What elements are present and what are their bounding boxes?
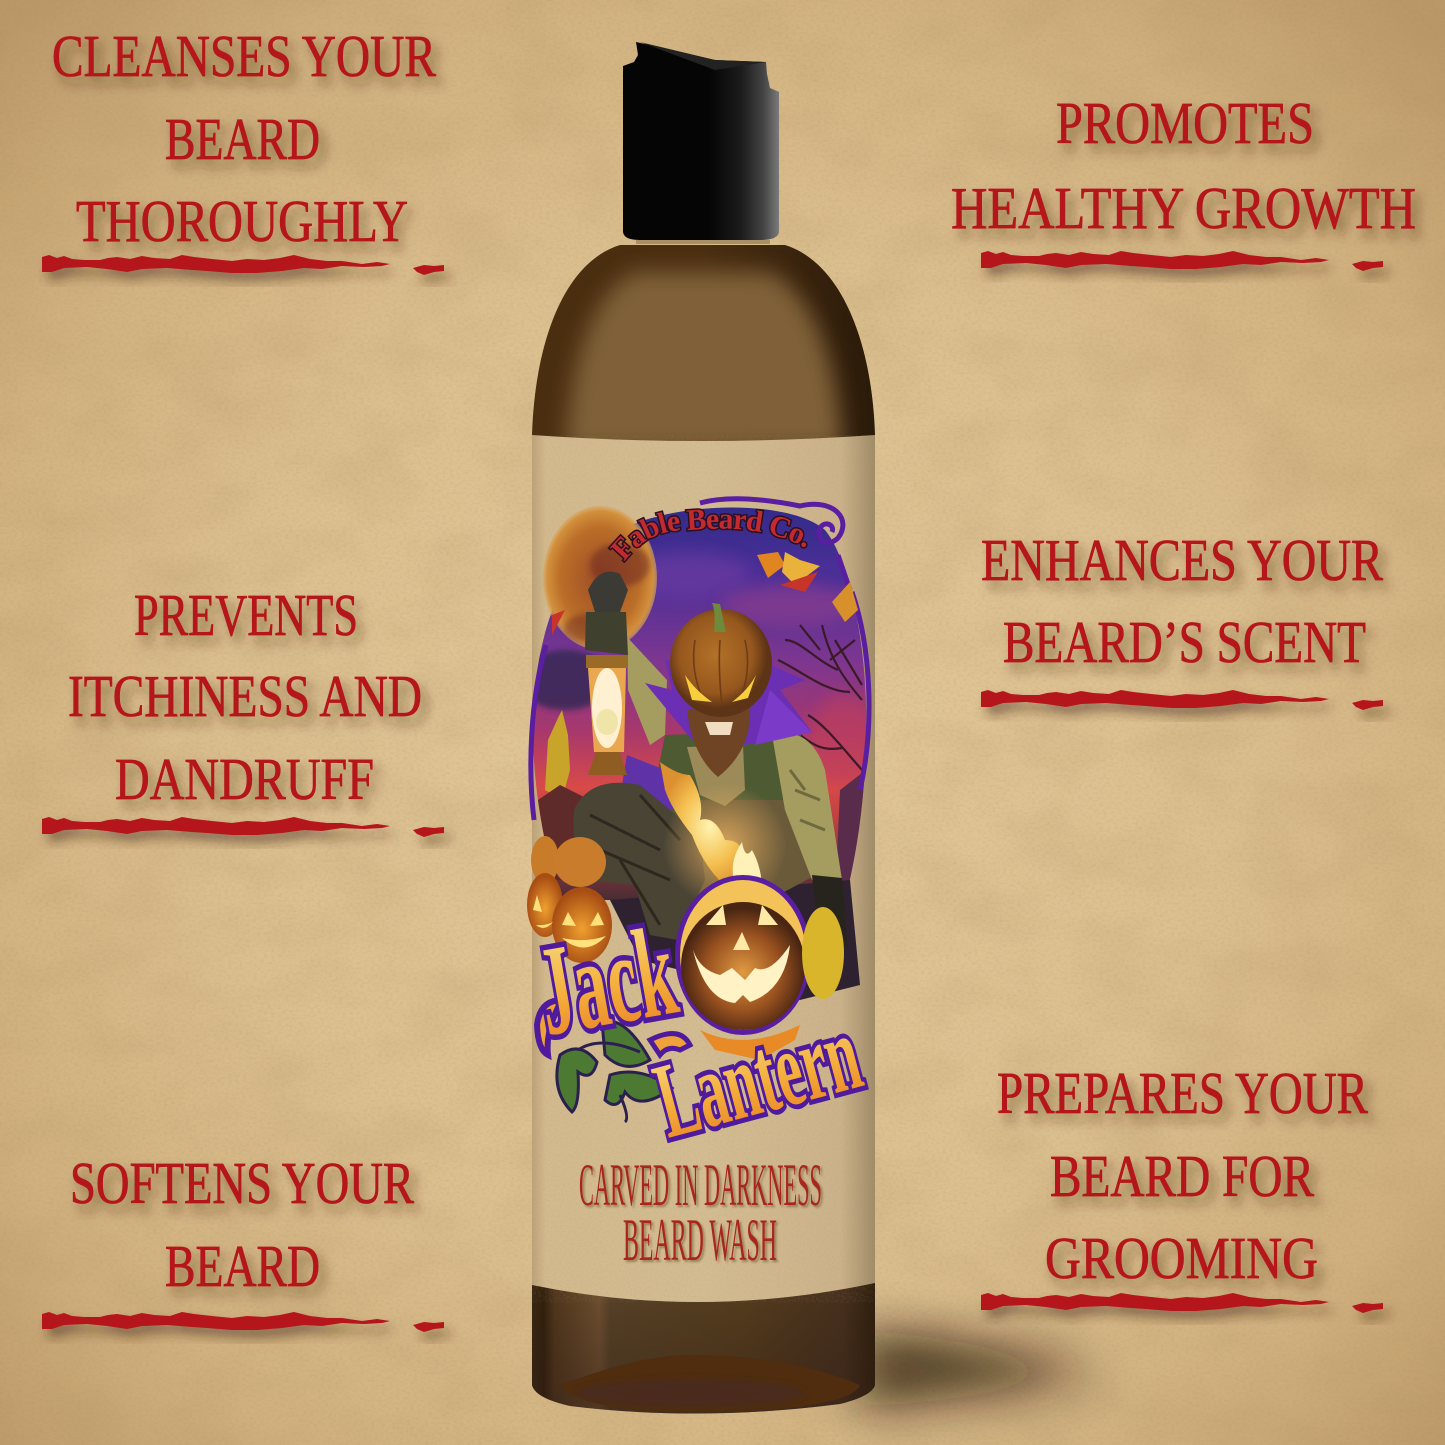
- autumn leaves: [552, 552, 858, 635]
- product name: [579, 1152, 822, 1273]
- harvest moon: [543, 506, 657, 650]
- illustration: pumpkin-headed figure: [573, 603, 860, 1000]
- illustration: night sky and moon: [519, 500, 880, 900]
- underline: torn red stroke: [42, 1312, 444, 1332]
- bottle cap: black flip-top: [623, 42, 779, 244]
- heading: prepares your beard for grooming: BEARD FOR: [1050, 1143, 1315, 1209]
- heading: prevents itchiness and dandruff: DANDRUFF: [115, 746, 374, 812]
- figure: glowing eyes: [685, 675, 712, 702]
- heading: prevents itchiness and dandruff: PREVENTS: [134, 582, 358, 648]
- heading: enhances your beard's scent: [981, 527, 1384, 675]
- heading: softens your beard: [70, 1150, 415, 1299]
- heading: prepares your beard for grooming: [997, 1060, 1369, 1291]
- underline: torn red stroke: [42, 255, 444, 275]
- bottle floor shadow: [860, 1330, 1100, 1408]
- title: Lantern: Lantern: [643, 993, 872, 1161]
- vine leaves: [557, 1021, 672, 1122]
- underline: torn red stroke: [981, 251, 1383, 271]
- figure: flames: [663, 783, 787, 907]
- heading: enhances your beard's scent: BEARD’S SCENT: [1003, 609, 1366, 675]
- figure: right arm: [772, 733, 842, 880]
- underline: torn red stroke: [981, 690, 1383, 710]
- carved jack-o-lantern: [675, 875, 844, 1060]
- heading: promotes healthy growth: [951, 90, 1416, 241]
- title: Lantern: [643, 993, 872, 1161]
- figure: purple cape: [645, 660, 812, 745]
- underline: torn red stroke: [981, 1293, 1383, 1313]
- bottle body: amber plastic: [530, 240, 878, 1425]
- figure: leg: [573, 783, 705, 940]
- heading: prepares your beard for grooming: GROOMING: [1045, 1225, 1318, 1291]
- heading: prevents itchiness and dandruff: [68, 582, 422, 812]
- brand: Fable Beard Co.: Fable Beard Co.: [608, 508, 808, 564]
- figure: pumpkin head: [670, 609, 772, 717]
- figure: raised arm: [627, 637, 667, 745]
- figure: beard: [687, 708, 750, 777]
- heading: cleanses your beard thoroughly: CLEANSES YOUR: [52, 23, 437, 89]
- bottle: [527, 42, 875, 1414]
- heading: cleanses your beard thoroughly: [52, 23, 437, 254]
- heading: cleanses your beard thoroughly: THOROUGHLY: [76, 188, 408, 254]
- product label: [527, 435, 875, 1302]
- heading: softens your beard: BEARD: [165, 1233, 320, 1299]
- figure: dark ground mass: [610, 880, 860, 1000]
- heading: softens your beard: SOFTENS YOUR: [70, 1150, 415, 1216]
- heading: cleanses your beard thoroughly: BEARD: [165, 106, 320, 172]
- purple frame around the scene: [531, 499, 869, 820]
- underline: torn red stroke: [42, 817, 444, 837]
- lantern: [585, 572, 628, 775]
- figure: scarf: [687, 745, 745, 806]
- product name: BEARD WASH: [623, 1207, 777, 1273]
- figure: gloved hand: [812, 875, 848, 950]
- pumpkins on the ground: [527, 836, 612, 963]
- title: Jack: Jack: [527, 899, 686, 1063]
- figure: torso and vest: [650, 730, 825, 905]
- title: Jack: [527, 899, 686, 1063]
- heading: promotes healthy growth: PROMOTES: [1056, 90, 1314, 156]
- text: CARVED IN DARKNESS: [579, 1152, 822, 1218]
- label paper: [532, 435, 875, 1302]
- heading: prevents itchiness and dandruff: ITCHINESS AND: [68, 663, 422, 729]
